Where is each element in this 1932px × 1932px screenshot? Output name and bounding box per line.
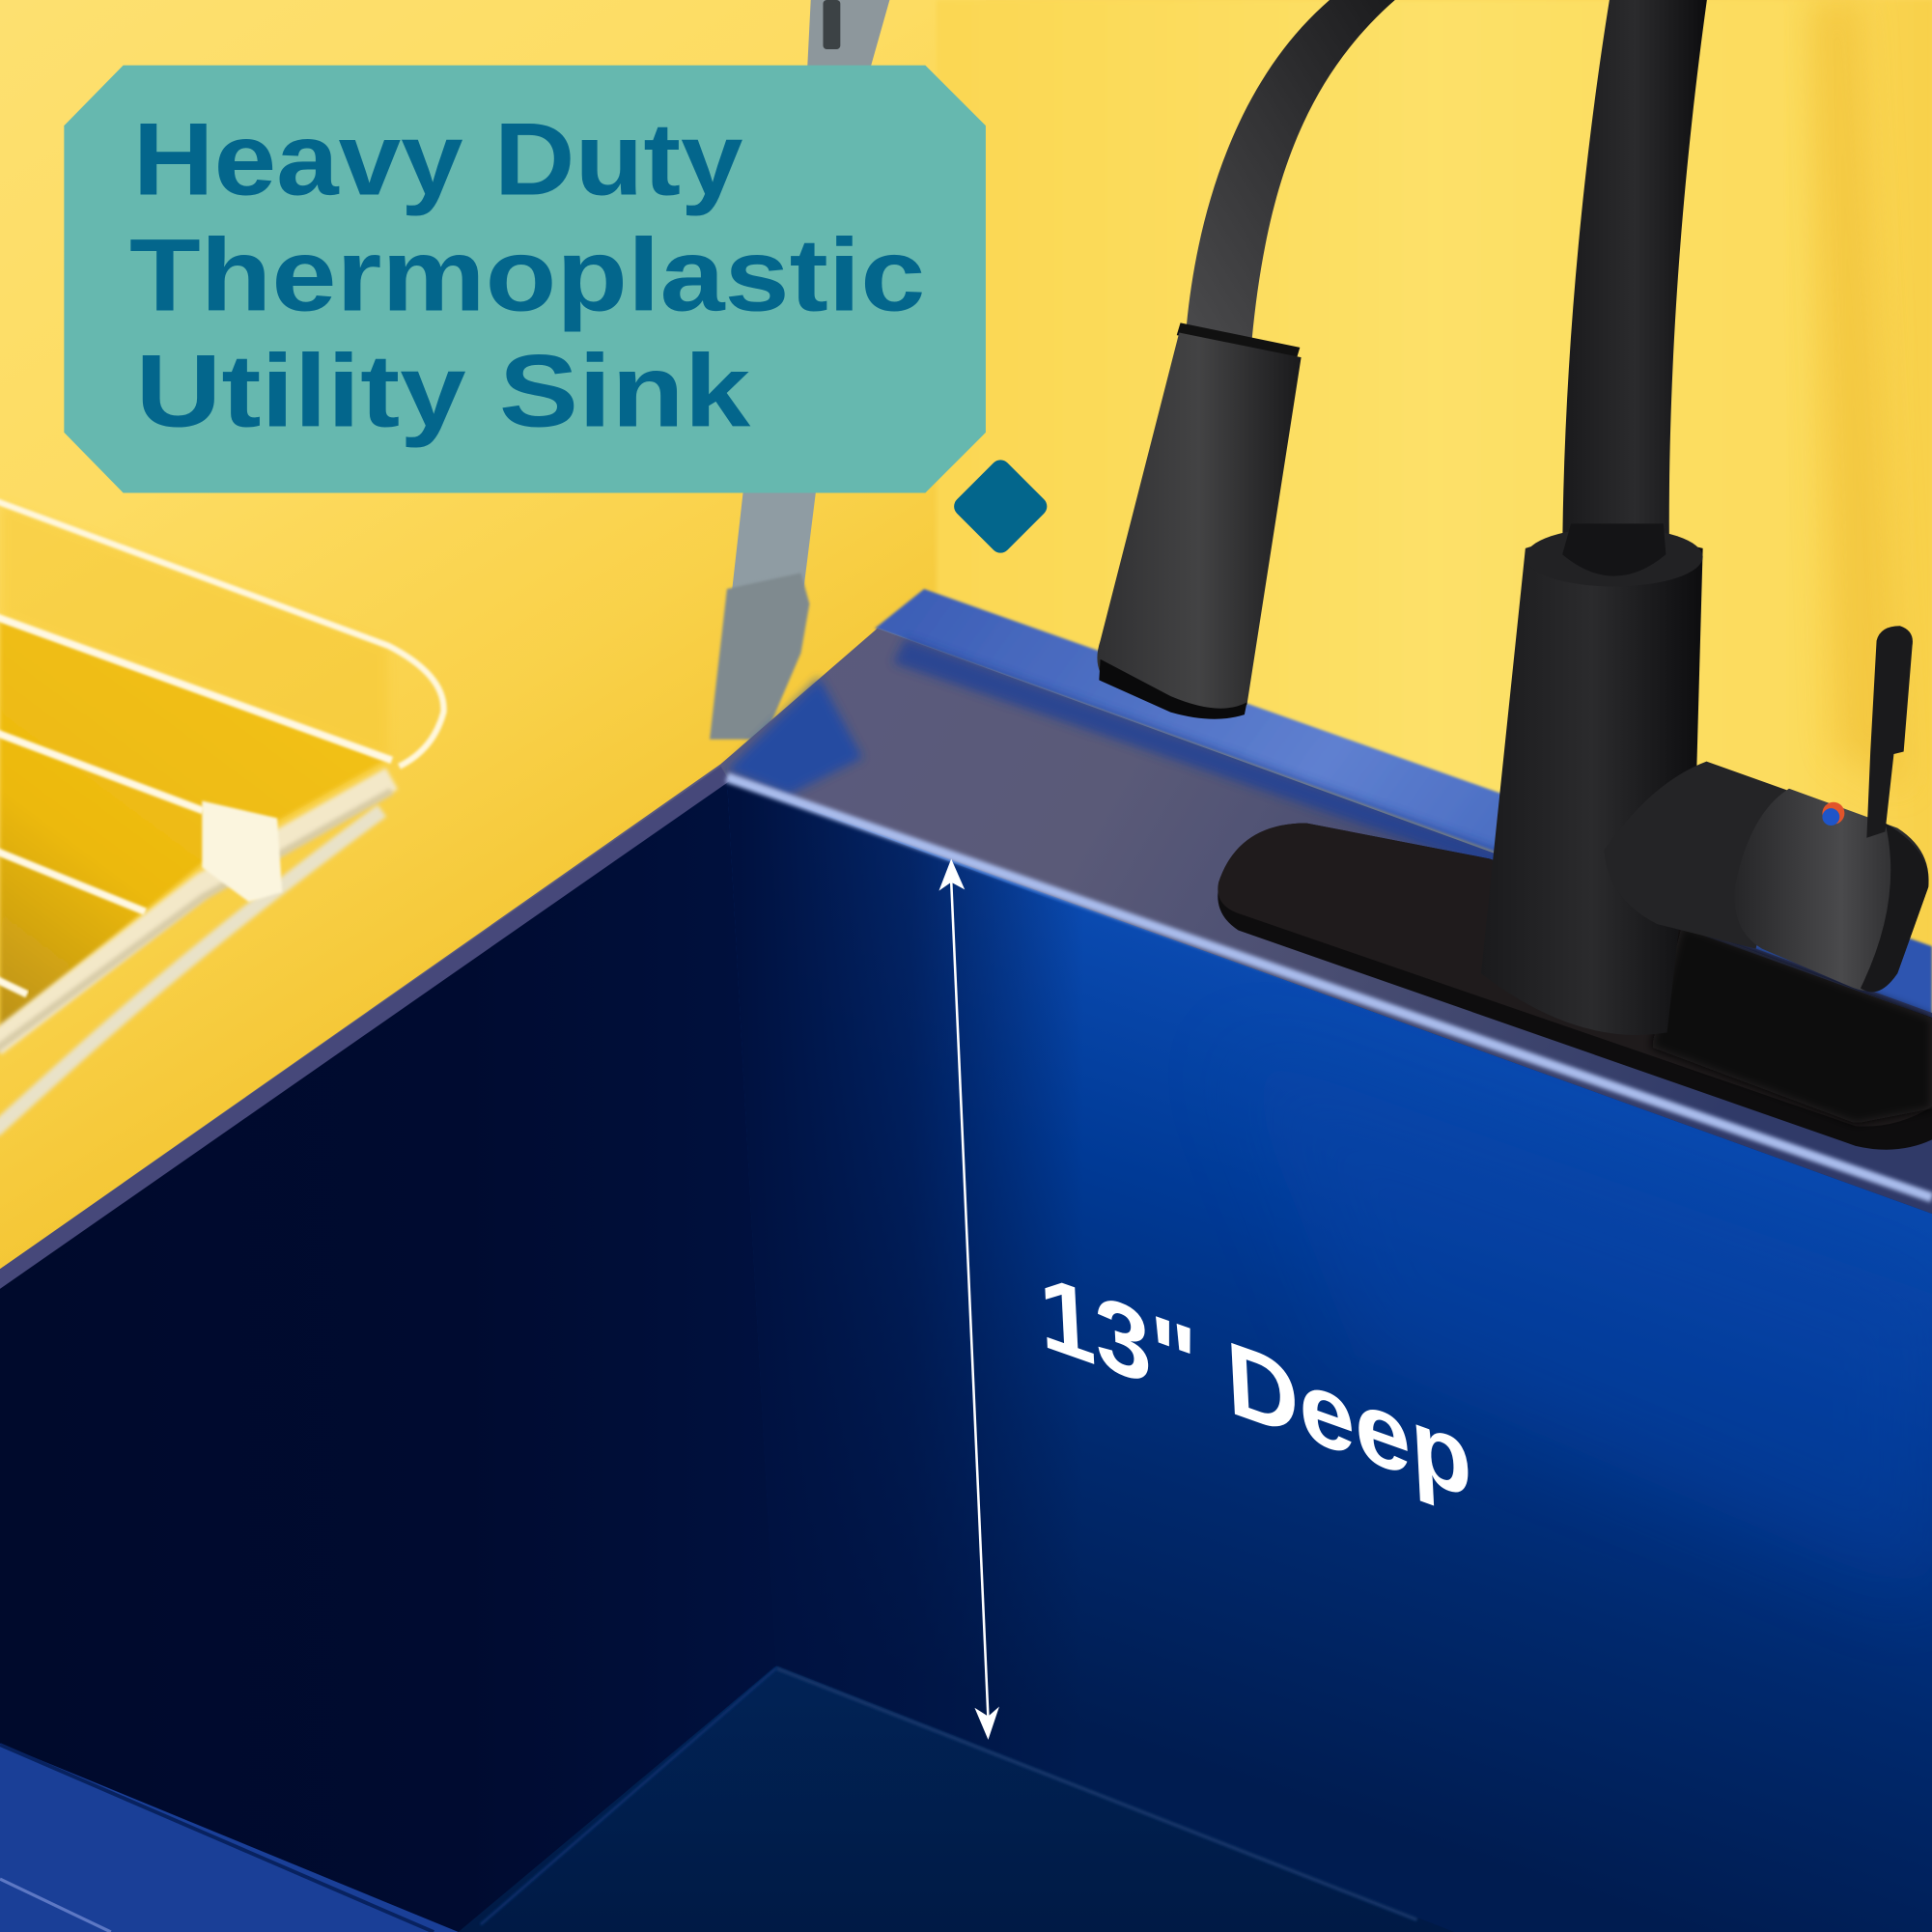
front rim edge line bbox=[0, 1879, 111, 1932]
floor edge highlight bbox=[776, 1668, 1417, 1919]
drying rack bbox=[0, 500, 444, 1132]
front rim of sink bbox=[0, 1744, 459, 1932]
decorative diamond bbox=[950, 456, 1051, 557]
faucet gooseneck arch bbox=[1187, 0, 1402, 340]
faucet mixer housing bbox=[1605, 762, 1929, 992]
sink floor bbox=[459, 1666, 1454, 1932]
background: yellow right wall bbox=[937, 0, 1932, 986]
sink top rim bbox=[0, 629, 1932, 1288]
faucet body bbox=[1481, 523, 1703, 1035]
faucet lever bbox=[1866, 626, 1913, 838]
background: yellow left wall bbox=[0, 0, 986, 1356]
rim front edge highlight bbox=[727, 777, 1932, 1197]
depth label: 13" Deep bbox=[1036, 1252, 1474, 1521]
title panel bbox=[64, 66, 986, 492]
title text: Utility Sink bbox=[135, 333, 751, 449]
rim blue corner highlight bbox=[727, 678, 862, 795]
right wall dark corner shading bbox=[727, 779, 1109, 1799]
depth arrow bbox=[938, 858, 999, 1740]
faucet shadow on wall bbox=[1811, 0, 1904, 789]
rim left edge shading bbox=[0, 767, 729, 1289]
rim back shadow bbox=[893, 638, 1516, 878]
faucet riser bbox=[1562, 0, 1708, 573]
sink right inner wall bbox=[727, 779, 1932, 1932]
faucet deck plate bbox=[1218, 823, 1932, 1150]
sink left inner wall bbox=[0, 779, 776, 1932]
title text: Heavy Duty bbox=[133, 101, 743, 217]
gray support post bbox=[710, 0, 889, 740]
right wall highlight band bbox=[1232, 1048, 1932, 1602]
sink back rim bbox=[875, 589, 1932, 1022]
front rim dark top edge bbox=[0, 1745, 434, 1932]
title text: Thermoplastic bbox=[129, 217, 925, 333]
sink interior base bbox=[0, 770, 1932, 1932]
pull-down spray head bbox=[1097, 322, 1302, 719]
